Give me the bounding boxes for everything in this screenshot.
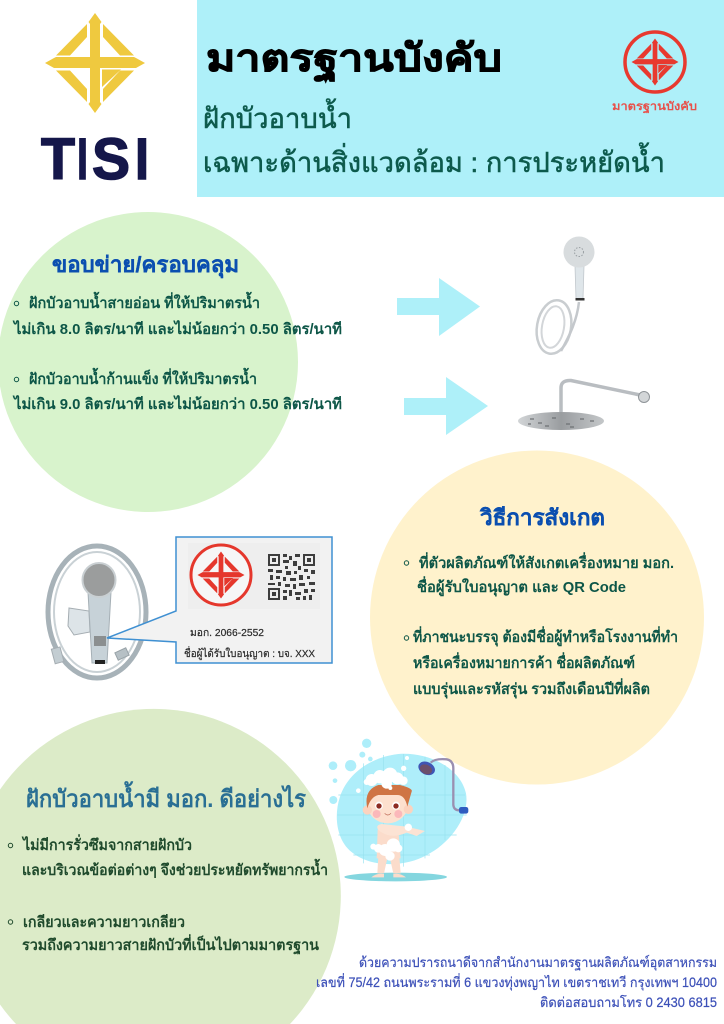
TISI wordmark bbox=[41, 127, 149, 192]
text block: on the packaging: หรือเครื่องหมายการค้า ชื่อผลิตภัณฑ์ bbox=[413, 652, 635, 672]
text block: footer contact: ติดต่อสอบถามโทร 0 2430 6815 bbox=[540, 994, 717, 1010]
text block: no leaks: ไม่มีการรั่วซึมจากสายฝักบัว bbox=[21, 834, 192, 854]
title: มาตรฐานบังคับ bbox=[206, 38, 502, 83]
callout: label example bbox=[107, 537, 332, 663]
panel: how to observe bbox=[370, 450, 704, 784]
text block: thread length bbox=[8, 914, 320, 955]
header banner bbox=[197, 0, 724, 197]
arrow: to rain shower bbox=[404, 377, 488, 435]
text block: flexible shower: ไม่เกิน 8.0 ลิตร/นาที และไม่น้อยกว่า 0.50 ลิตร/นาที bbox=[12, 319, 342, 338]
subtitle: เฉพาะด้านสิ่งแวดล้อม : การประหยัดน้ำ bbox=[203, 142, 665, 178]
text block: on the packaging: แบบรุ่นและรหัสรุ่น รวมถึงเดือนปีที่ผลิต bbox=[413, 678, 650, 699]
text block: thread length: รวมถึงความยาวสายฝักบัวที่เป็นไปตามมาตรฐาน bbox=[22, 934, 320, 955]
icon: hand shower with hose bbox=[533, 236, 594, 357]
text block: no leaks bbox=[8, 834, 328, 879]
icon: rain shower bbox=[518, 380, 650, 430]
icon: shower set product photo bbox=[48, 546, 146, 678]
icon: QR code bbox=[268, 554, 315, 600]
text block: on the product: ชื่อผู้รับใบอนุญาต และ QR Code bbox=[417, 576, 626, 597]
text block: rigid shower bbox=[12, 367, 342, 413]
subtitle: ฝักบัวอาบน้ำ bbox=[203, 98, 352, 134]
text block: rigid shower: ฝักบัวอาบน้ำก้านแข็ง ที่ให้ปริมาตรน้ำ bbox=[29, 367, 257, 388]
icon: red standard mark bbox=[612, 32, 697, 114]
text block: no leaks: และบริเวณข้อต่อต่างๆ จึงช่วยประหยัดทรัพยากรน้ำ bbox=[22, 858, 328, 879]
text block: footer contact bbox=[316, 954, 717, 1010]
text block: licence details bbox=[184, 627, 315, 660]
TISI wordmark: T bbox=[41, 127, 75, 192]
panel: scope bbox=[0, 212, 342, 512]
text block: licence details: มอก. 2066-2552 bbox=[190, 627, 264, 639]
heading: how to observe: วิธีการสังเกต bbox=[479, 505, 605, 530]
text block: on the packaging: ที่ภาชนะบรรจุ ต้องมีชื่อผู้ทำหรือโรงงานที่ทำ bbox=[413, 626, 678, 647]
text block: flexible shower bbox=[12, 291, 342, 338]
text block: on the product: ที่ตัวผลิตภัณฑ์ให้สังเกตเครื่องหมาย มอก. bbox=[419, 552, 674, 572]
text block: licence details: ชื่อผู้ได้รับใบอนุญาต : บจ. XXX bbox=[184, 646, 315, 660]
TISI wordmark: S bbox=[92, 127, 130, 192]
icon: red standard mark: มาตรฐานบังคับ bbox=[612, 100, 697, 114]
TISI wordmark: I bbox=[135, 127, 149, 192]
text block: flexible shower: ฝักบัวอาบน้ำสายอ่อน ที่ให้ปริมาตรน้ำ bbox=[29, 291, 260, 312]
text block: on the product bbox=[404, 552, 674, 597]
icon: child showering illustration bbox=[329, 739, 468, 881]
text block: rigid shower: ไม่เกิน 9.0 ลิตร/นาที และไม่น้อยกว่า 0.50 ลิตร/นาที bbox=[12, 394, 342, 413]
arrow: to hand shower bbox=[397, 278, 480, 336]
TISI wordmark: I bbox=[77, 127, 88, 192]
heading: benefits: ฝักบัวอาบน้ำมี มอก. ดีอย่างไร bbox=[26, 780, 306, 813]
heading: scope: ขอบข่าย/ครอบคลุม bbox=[52, 252, 239, 279]
icon: standard mark in callout bbox=[191, 545, 251, 605]
panel: benefits bbox=[0, 709, 341, 1024]
icon: TISI gold logo bbox=[45, 13, 145, 113]
text block: thread length: เกลียวและความยาวเกลียว bbox=[23, 914, 185, 931]
subtitle bbox=[203, 98, 665, 178]
text block: on the packaging bbox=[404, 626, 678, 699]
